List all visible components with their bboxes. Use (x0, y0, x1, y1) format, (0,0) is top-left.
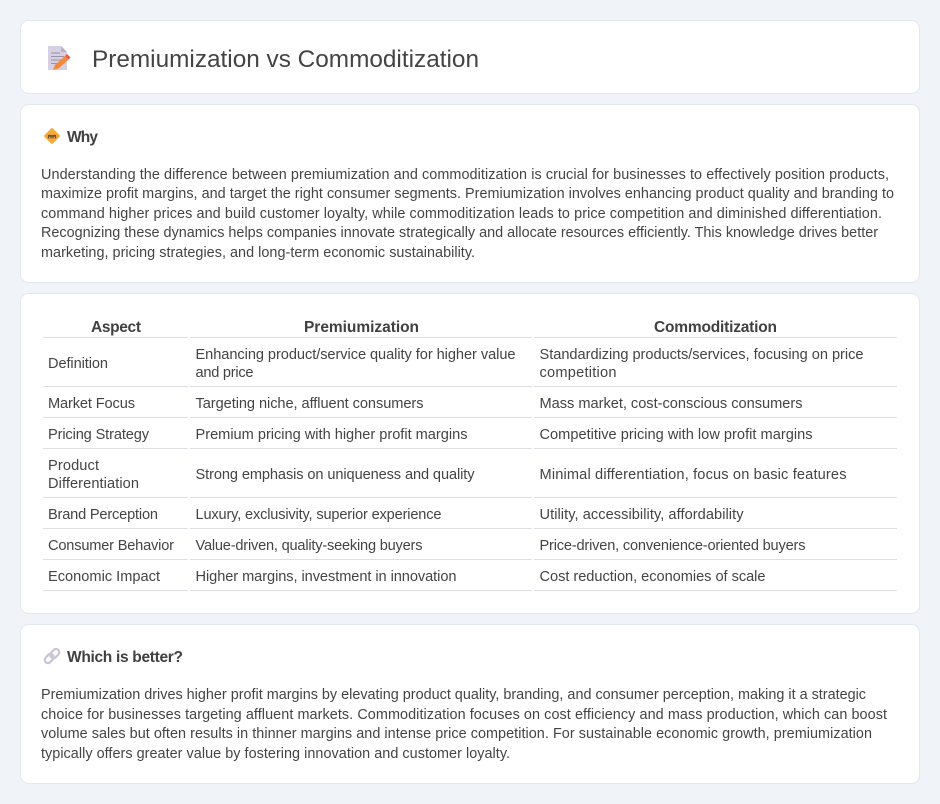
panel: comparison table (20, 294, 920, 614)
table header row (91, 319, 777, 336)
row: economic impact: Economic Impact (48, 569, 160, 585)
table header row: Premiumization (304, 319, 419, 336)
panel: why (20, 104, 920, 282)
row: definition: competition (540, 365, 616, 381)
row: product differentiation (48, 458, 846, 492)
row: market focus: Market Focus (48, 396, 135, 412)
row: definition: Standardizing products/services, focusing on price (540, 347, 864, 363)
row: pricing strategy (48, 427, 812, 443)
text block: why explanation (41, 167, 894, 261)
row: pricing strategy: Pricing Strategy (48, 427, 150, 443)
row: market focus (48, 396, 802, 412)
heading: which is better: Which is better? (67, 649, 183, 666)
title: Premiumization vs Commoditization (92, 46, 479, 73)
row: product differentiation: Differentiation (48, 476, 139, 492)
row: brand perception (48, 507, 744, 523)
row: pricing strategy: Premium pricing with higher profit margins (196, 427, 468, 443)
table header row: Commoditization (654, 319, 777, 336)
text block: verdict: Premiumization drives higher profit margins by elevating product quality, branding, and consumer perception, making it a strategic (41, 687, 866, 703)
text block: verdict: volume sales but often results in thinner margins and intense price competition. For sustainable economic growth, premiumization (41, 726, 872, 742)
row: definition: and price (196, 365, 254, 381)
row: consumer behavior: Value-driven, quality-seeking buyers (196, 538, 422, 554)
row: definition: Definition (48, 356, 108, 372)
row: definition: Enhancing product/service quality for higher value (196, 347, 516, 363)
row: product differentiation: Strong emphasis on uniqueness and quality (196, 467, 475, 483)
row: consumer behavior (48, 538, 806, 554)
text block: why explanation: Recognizing these dynamics helps companies innovate strategically and allocate resources efficiently. This knowledge drives better (41, 225, 878, 241)
text block: why explanation: command higher prices and build customer loyalty, while commoditization leads to price competition and diminished differentiation. (41, 206, 882, 222)
text block: verdict: choice for businesses targeting affluent markets. Commoditization focuses on cost efficiency and mass production, which can boost (41, 707, 887, 723)
row: definition (48, 347, 864, 381)
text block: verdict: typically offers greater value by fostering innovation and customer loyalty. (41, 746, 510, 762)
row: product differentiation: Product (48, 458, 99, 474)
text block: why explanation: Understanding the difference between premiumization and commoditization is crucial for businesses to effectively position products, (41, 167, 889, 183)
text block: why explanation: maximize profit margins, and target the right consumer segments. Premiumization involves enhancing product quality and branding to (41, 186, 894, 202)
row: market focus: Targeting niche, affluent consumers (196, 396, 424, 412)
panel: header (20, 20, 920, 94)
row: market focus: Mass market, cost-conscious consumers (540, 396, 802, 412)
text block: verdict (41, 687, 887, 762)
row: brand perception: Luxury, exclusivity, superior experience (196, 507, 442, 523)
row: economic impact: Higher margins, investment in innovation (196, 569, 456, 585)
icon: document with pencil (48, 46, 70, 70)
row: pricing strategy: Competitive pricing with low profit margins (540, 427, 812, 443)
icon: warning diamond (44, 128, 60, 144)
text block: why explanation: marketing, pricing strategies, and long-term economic sustainability. (41, 245, 475, 261)
panel: which is better (20, 624, 920, 784)
row: consumer behavior: Consumer Behavior (48, 538, 174, 554)
row: economic impact: Cost reduction, economies of scale (540, 569, 766, 585)
row: consumer behavior: Price-driven, convenience-oriented buyers (540, 538, 806, 554)
row: brand perception: Brand Perception (48, 507, 158, 523)
row: product differentiation: Minimal differentiation, focus on basic features (540, 467, 846, 483)
heading: why: Why (67, 129, 98, 146)
row: brand perception: Utility, accessibility, affordability (540, 507, 744, 523)
table header row: Aspect (91, 319, 141, 336)
icon: link (43, 648, 60, 664)
row: economic impact (48, 569, 766, 585)
